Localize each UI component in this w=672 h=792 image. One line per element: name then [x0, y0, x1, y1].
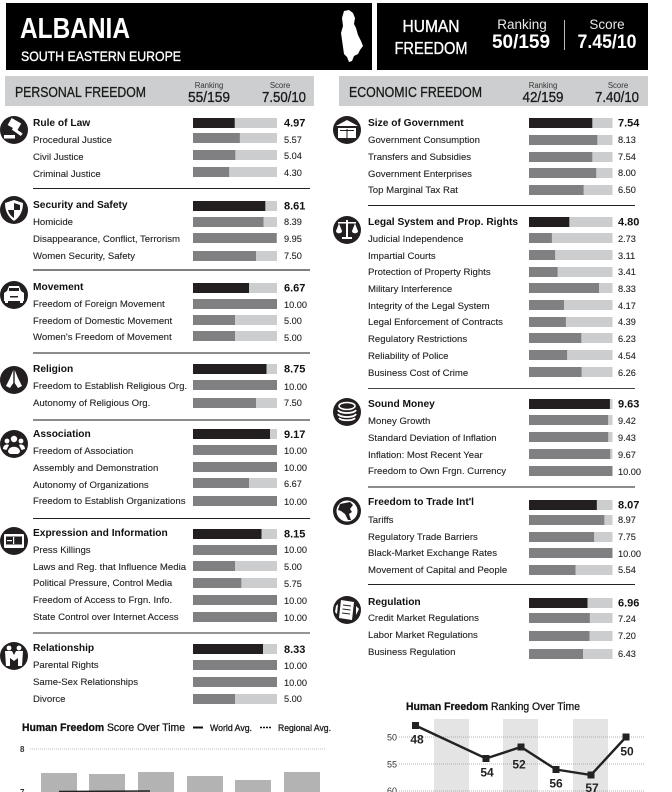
- panel: association: [0, 429, 307, 507]
- chart title: Human Freedom Score Over Time: [22, 722, 185, 734]
- row: reliability of police: 4.54: [618, 351, 636, 361]
- panel: economic freedom heading: Ranking: [529, 81, 557, 90]
- row: freedom of domestic movement: 5.00: [284, 316, 302, 326]
- row: freedom of association: [33, 445, 307, 457]
- panel: movement: [0, 281, 307, 343]
- human freedom score: [578, 17, 636, 53]
- row: state control over internet access: State Control over Internet Access: [33, 612, 179, 623]
- row: divorce: 5.00: [284, 694, 302, 704]
- row: parental rights: Parental Rights: [33, 660, 99, 671]
- row: procedural justice: Procedural Justice: [33, 135, 112, 146]
- icon: government building: [333, 116, 361, 144]
- row: standard deviation of inflation: Standard Deviation of Inflation: [368, 433, 497, 444]
- row: freedom of domestic movement: [33, 315, 302, 327]
- row: freedom to trade int'l: [368, 497, 639, 512]
- row: legal system and prop. rights: [368, 216, 639, 228]
- row: civil justice: [33, 150, 302, 163]
- panel: personal freedom heading: 7.50/10: [262, 90, 306, 106]
- ranking value labels: 56: [549, 776, 563, 790]
- row: integrity of the legal system: [368, 300, 636, 312]
- row: homicide: Homicide: [33, 217, 73, 228]
- row: freedom to own frgn. currency: Freedom to Own Frgn. Currency: [368, 466, 506, 477]
- row: reliability of police: [368, 350, 636, 362]
- row: reliability of police: Reliability of Police: [368, 351, 449, 362]
- row: movement: [33, 282, 305, 294]
- panel: regulation: [333, 596, 639, 659]
- panel: economic freedom heading: [339, 76, 648, 106]
- region name: SOUTH EASTERN EUROPE: [21, 48, 181, 64]
- panel: personal freedom heading: Ranking: [195, 81, 223, 90]
- row: inflation: most recent year: 9.67: [618, 450, 636, 460]
- row: size of government: Size of Government: [368, 118, 464, 129]
- row: criminal justice: [33, 167, 302, 180]
- human freedom heading: FREEDOM: [394, 38, 468, 58]
- row: sound money: Sound Money: [368, 399, 435, 410]
- icon: scales of justice: [333, 216, 361, 244]
- ranking value labels: 54: [480, 766, 494, 780]
- row: government enterprises: 8.00: [618, 168, 636, 178]
- row: movement: 6.67: [284, 282, 305, 294]
- row: government enterprises: Government Enterprises: [368, 169, 472, 180]
- row: judicial independence: Judicial Independence: [368, 234, 463, 245]
- human freedom score: 7.45/10: [578, 32, 636, 53]
- row: freedom to trade int'l: Freedom to Trade Int'l: [368, 497, 474, 508]
- row: press killings: 10.00: [284, 545, 307, 555]
- row: autonomy of organizations: 6.67: [284, 479, 302, 489]
- panel: personal freedom heading: 55/159: [188, 90, 230, 106]
- row: legal system and prop. rights: 4.80: [618, 216, 639, 228]
- row: state control over internet access: 10.00: [284, 613, 307, 623]
- row: criminal justice: Criminal Justice: [33, 169, 101, 180]
- row: regulatory trade barriers: 7.75: [618, 532, 636, 542]
- row: labor market regulations: Labor Market Regulations: [368, 630, 478, 641]
- row: religion: 8.75: [284, 364, 305, 376]
- panel: legal system and property rights: [333, 216, 639, 379]
- row: integrity of the legal system: 4.17: [618, 301, 636, 311]
- row: credit market regulations: [368, 613, 636, 624]
- row: impartial courts: [368, 250, 635, 262]
- row: size of government: [368, 118, 640, 130]
- row: procedural justice: 5.57: [284, 135, 302, 145]
- row: homicide: 8.39: [284, 217, 302, 227]
- human freedom heading: HUMAN: [402, 16, 460, 36]
- row: movement: Movement: [33, 282, 84, 293]
- row: tariffs: Tariffs: [368, 515, 394, 526]
- row: security and safety: [33, 200, 305, 212]
- row: regulatory restrictions: Regulatory Restrictions: [368, 334, 467, 345]
- row: movement of capital and people: 5.54: [618, 565, 636, 575]
- icon: coin stack: [333, 398, 361, 426]
- row: expression and information: Expression and Information: [33, 528, 168, 539]
- row: freedom of association: 10.00: [284, 446, 307, 456]
- country name: ALBANIA: [20, 13, 130, 45]
- row: freedom of foreign movement: Freedom of Foreign Movement: [33, 299, 165, 310]
- row: regulation: Regulation: [368, 597, 421, 608]
- panel: rule of law: [0, 116, 305, 180]
- axis labels and gridlines: [387, 732, 644, 792]
- row: press killings: [33, 545, 307, 556]
- icon: shield: [0, 196, 28, 224]
- row: transfers and subsidies: Transfers and Subsidies: [368, 152, 471, 163]
- row: credit market regulations: 7.24: [618, 614, 636, 624]
- row: political pressure, control media: 5.75: [284, 579, 302, 589]
- row: protection of property rights: [368, 267, 636, 278]
- row: homicide: [33, 217, 302, 228]
- row: autonomy of religious org.: 7.50: [284, 398, 302, 408]
- row: divorce: Divorce: [33, 694, 66, 705]
- legend: world average: [193, 723, 252, 733]
- row: same-sex relationships: Same-Sex Relationships: [33, 677, 138, 688]
- row: freedom of access to frgn. info.: [33, 595, 307, 606]
- row: association: Association: [33, 429, 91, 440]
- header: human freedom summary: [377, 3, 648, 70]
- row: criminal justice: 4.30: [284, 168, 302, 178]
- panel: economic freedom heading: 42/159: [522, 90, 564, 106]
- row: tariffs: 8.97: [618, 515, 636, 525]
- row: political pressure, control media: [33, 578, 302, 589]
- row: regulatory restrictions: [368, 333, 636, 345]
- row: disappearance, conflict, terrorism: 9.95: [284, 234, 302, 244]
- row: sound money: 9.63: [618, 398, 639, 410]
- chart title: Human Freedom Ranking Over Time: [406, 701, 580, 713]
- row: regulatory trade barriers: Regulatory Trade Barriers: [368, 532, 478, 543]
- legend: world average: World Avg.: [210, 723, 252, 733]
- row: judicial independence: 2.73: [618, 234, 636, 244]
- row: freedom to establish organizations: Freedom to Establish Organizations: [33, 496, 186, 507]
- row: military interference: 8.33: [618, 284, 636, 294]
- row: women's freedom of movement: Women's Freedom of Movement: [33, 332, 172, 343]
- icon: couple: [0, 642, 28, 670]
- row: autonomy of religious org.: [33, 398, 302, 409]
- icon: monitor: [0, 527, 28, 555]
- row: civil justice: 5.04: [284, 151, 302, 161]
- row: labor market regulations: 7.20: [618, 631, 636, 641]
- row: freedom to establish religious org.: [33, 380, 307, 392]
- row: legal enforcement of contracts: 4.39: [618, 317, 636, 327]
- row: regulatory trade barriers: [368, 532, 636, 543]
- row: top marginal tax rat: Top Marginal Tax Rat: [368, 185, 458, 196]
- row: freedom to establish religious org.: 10.00: [284, 382, 307, 392]
- row: business regulation: Business Regulation: [368, 647, 455, 658]
- panel: size of government: [333, 116, 640, 196]
- row: relationship: Relationship: [33, 643, 94, 654]
- human freedom ranking: Ranking: [497, 17, 547, 32]
- row: religion: [33, 364, 305, 376]
- row: freedom of domestic movement: Freedom of Domestic Movement: [33, 316, 172, 327]
- row: government enterprises: [368, 168, 636, 180]
- row: state control over internet access: [33, 612, 307, 623]
- panel: economic freedom heading: ECONOMIC FREEDOM: [349, 85, 482, 101]
- ranking value labels: 48: [410, 732, 424, 746]
- row: laws and reg. that influence media: 5.00: [284, 562, 302, 572]
- human freedom ranking: [492, 17, 550, 53]
- icon: globe: [333, 497, 361, 525]
- row: parental rights: 10.00: [284, 661, 307, 671]
- row: civil justice: Civil Justice: [33, 152, 84, 163]
- row: inflation: most recent year: Inflation: Most Recent Year: [368, 450, 483, 461]
- row: freedom to establish religious org.: Freedom to Establish Religious Org.: [33, 381, 187, 392]
- panel: sound money: [333, 398, 641, 477]
- row: business cost of crime: [368, 367, 636, 379]
- row: business regulation: 6.43: [618, 649, 636, 659]
- row: freedom of access to frgn. info.: 10.00: [284, 596, 307, 606]
- icon: gavel: [0, 116, 28, 144]
- row: money growth: Money Growth: [368, 416, 430, 427]
- row: regulation: [368, 597, 639, 610]
- row: standard deviation of inflation: 9.43: [618, 433, 636, 443]
- row: women security, safety: [33, 251, 302, 262]
- ranking value labels: [410, 732, 634, 792]
- row: protection of property rights: 3.41: [618, 267, 636, 277]
- row: autonomy of religious org.: Autonomy of Religious Org.: [33, 398, 150, 409]
- row: freedom to own frgn. currency: 10.00: [618, 467, 641, 477]
- axis labels and gridlines: 50: [387, 732, 397, 742]
- chart: human freedom ranking over time: [387, 701, 644, 792]
- row: money growth: 9.42: [618, 416, 636, 426]
- shaded year bands: [434, 719, 608, 792]
- row: women security, safety: Women Security, Safety: [33, 251, 135, 262]
- row: freedom of foreign movement: [33, 299, 307, 310]
- row: women's freedom of movement: 5.00: [284, 333, 302, 343]
- row: government consumption: [368, 135, 636, 146]
- row: size of government: 7.54: [618, 118, 640, 130]
- row: credit market regulations: Credit Market Regulations: [368, 613, 479, 624]
- row: freedom to establish organizations: 10.00: [284, 497, 307, 507]
- row: transfers and subsidies: [368, 152, 636, 163]
- row: labor market regulations: [368, 630, 636, 641]
- row: assembly and demonstration: Assembly and Demonstration: [33, 463, 158, 474]
- row: relationship: 8.33: [284, 644, 305, 656]
- row: sound money: [368, 398, 639, 410]
- header: country title: [6, 3, 372, 70]
- row: protection of property rights: Protection of Property Rights: [368, 267, 491, 278]
- panel: security and safety: [0, 196, 305, 262]
- icon: car: [0, 281, 28, 309]
- row: standard deviation of inflation: [368, 432, 636, 444]
- row: freedom to trade int'l: 8.07: [618, 500, 639, 512]
- row: inflation: most recent year: [368, 449, 636, 461]
- row: black-market exchange rates: Black-Market Exchange Rates: [368, 548, 497, 559]
- human freedom ranking: 50/159: [492, 32, 550, 53]
- row: judicial independence: [368, 233, 636, 245]
- row: political pressure, control media: Political Pressure, Control Media: [33, 578, 173, 589]
- icon: praying hands: [0, 366, 28, 394]
- row: security and safety: 8.61: [284, 200, 305, 212]
- row: military interference: [368, 283, 636, 295]
- row: procedural justice: [33, 133, 302, 146]
- row: disappearance, conflict, terrorism: Disappearance, Conflict, Terrorism: [33, 234, 180, 245]
- row: government consumption: Government Consumption: [368, 135, 480, 146]
- row: business regulation: [368, 647, 636, 659]
- axis labels and gridlines: 55: [387, 760, 397, 770]
- row: business cost of crime: Business Cost of Crime: [368, 368, 468, 379]
- row: regulatory restrictions: 6.23: [618, 334, 636, 344]
- panel: religion: [0, 364, 307, 409]
- human freedom heading: [394, 16, 468, 58]
- row: women security, safety: 7.50: [284, 251, 302, 261]
- ranking line: [416, 726, 626, 775]
- row: top marginal tax rat: [368, 185, 636, 196]
- row: tariffs: [368, 515, 636, 526]
- row: freedom to establish organizations: [33, 496, 307, 507]
- row: legal enforcement of contracts: [368, 317, 636, 328]
- panel: personal freedom heading: PERSONAL FREEDOM: [15, 85, 146, 101]
- icon: map of Albania: [341, 10, 363, 62]
- row: disappearance, conflict, terrorism: [33, 233, 302, 245]
- row: business cost of crime: 6.26: [618, 368, 636, 378]
- row: assembly and demonstration: 10.00: [284, 463, 307, 473]
- row: freedom of association: Freedom of Association: [33, 446, 133, 457]
- row: same-sex relationships: 10.00: [284, 678, 307, 688]
- row: same-sex relationships: [33, 677, 307, 688]
- chart: human freedom score over time: [20, 722, 331, 792]
- panel: personal freedom heading: Score: [270, 81, 290, 90]
- panel: personal freedom heading: [5, 76, 314, 106]
- panel: freedom to trade internationally: [333, 497, 641, 576]
- row: integrity of the legal system: Integrity of the Legal System: [368, 301, 490, 312]
- row: impartial courts: 3.11: [618, 251, 635, 261]
- row: autonomy of organizations: Autonomy of Organizations: [33, 480, 149, 491]
- row: assembly and demonstration: [33, 462, 307, 474]
- row: press killings: Press Killings: [33, 545, 91, 556]
- row: black-market exchange rates: 10.00: [618, 549, 641, 559]
- row: movement of capital and people: [368, 565, 636, 576]
- ranking value labels: 50: [620, 744, 634, 758]
- row: parental rights: [33, 660, 307, 671]
- row: impartial courts: Impartial Courts: [368, 251, 436, 262]
- row: relationship: [33, 643, 305, 656]
- row: security and safety: Security and Safety: [33, 200, 128, 211]
- legend: regional average: Regional Avg.: [278, 723, 331, 733]
- ranking markers: [412, 722, 630, 778]
- row: legal system and prop. rights: Legal System and Prop. Rights: [368, 217, 518, 228]
- row: legal enforcement of contracts: Legal Enforcement of Contracts: [368, 317, 503, 328]
- row: government consumption: 8.13: [618, 135, 636, 145]
- row: religion: Religion: [33, 364, 73, 375]
- row: military interference: Military Interference: [368, 284, 452, 295]
- icon: document: [333, 596, 361, 624]
- row: top marginal tax rat: 6.50: [618, 185, 636, 195]
- panel: relationship: [0, 642, 307, 705]
- row: freedom of access to frgn. info.: Freedom of Access to Frgn. Info.: [33, 595, 172, 606]
- row: expression and information: 8.15: [284, 528, 305, 540]
- row: freedom of foreign movement: 10.00: [284, 300, 307, 310]
- row: expression and information: [33, 528, 305, 540]
- row: rule of law: Rule of Law: [33, 118, 90, 129]
- row: women's freedom of movement: [33, 331, 302, 343]
- row: association: 9.17: [284, 429, 305, 441]
- human freedom score: Score: [589, 17, 625, 32]
- row: black-market exchange rates: [368, 548, 641, 559]
- row: regulation: 6.96: [618, 598, 639, 610]
- row: freedom to own frgn. currency: [368, 466, 641, 477]
- row: movement of capital and people: Movement of Capital and People: [368, 565, 507, 576]
- row: transfers and subsidies: 7.54: [618, 152, 636, 162]
- ranking value labels: 52: [512, 758, 526, 772]
- panel: economic freedom heading: Score: [608, 81, 628, 90]
- world average line: [59, 790, 150, 792]
- row: autonomy of organizations: [33, 478, 302, 491]
- score bars: [41, 772, 320, 792]
- row: rule of law: [33, 118, 305, 130]
- row: divorce: [33, 694, 302, 705]
- axis label 8: 8: [20, 745, 25, 754]
- icon: group of people: [0, 430, 28, 458]
- panel: expression and information: [0, 527, 307, 623]
- row: laws and reg. that influence media: Laws and Reg. that Influence Media: [33, 562, 187, 573]
- panel: economic freedom heading: 7.40/10: [595, 90, 639, 106]
- row: money growth: [368, 415, 636, 427]
- row: association: [33, 429, 305, 441]
- row: rule of law: 4.97: [284, 118, 305, 130]
- row: laws and reg. that influence media: [33, 561, 302, 573]
